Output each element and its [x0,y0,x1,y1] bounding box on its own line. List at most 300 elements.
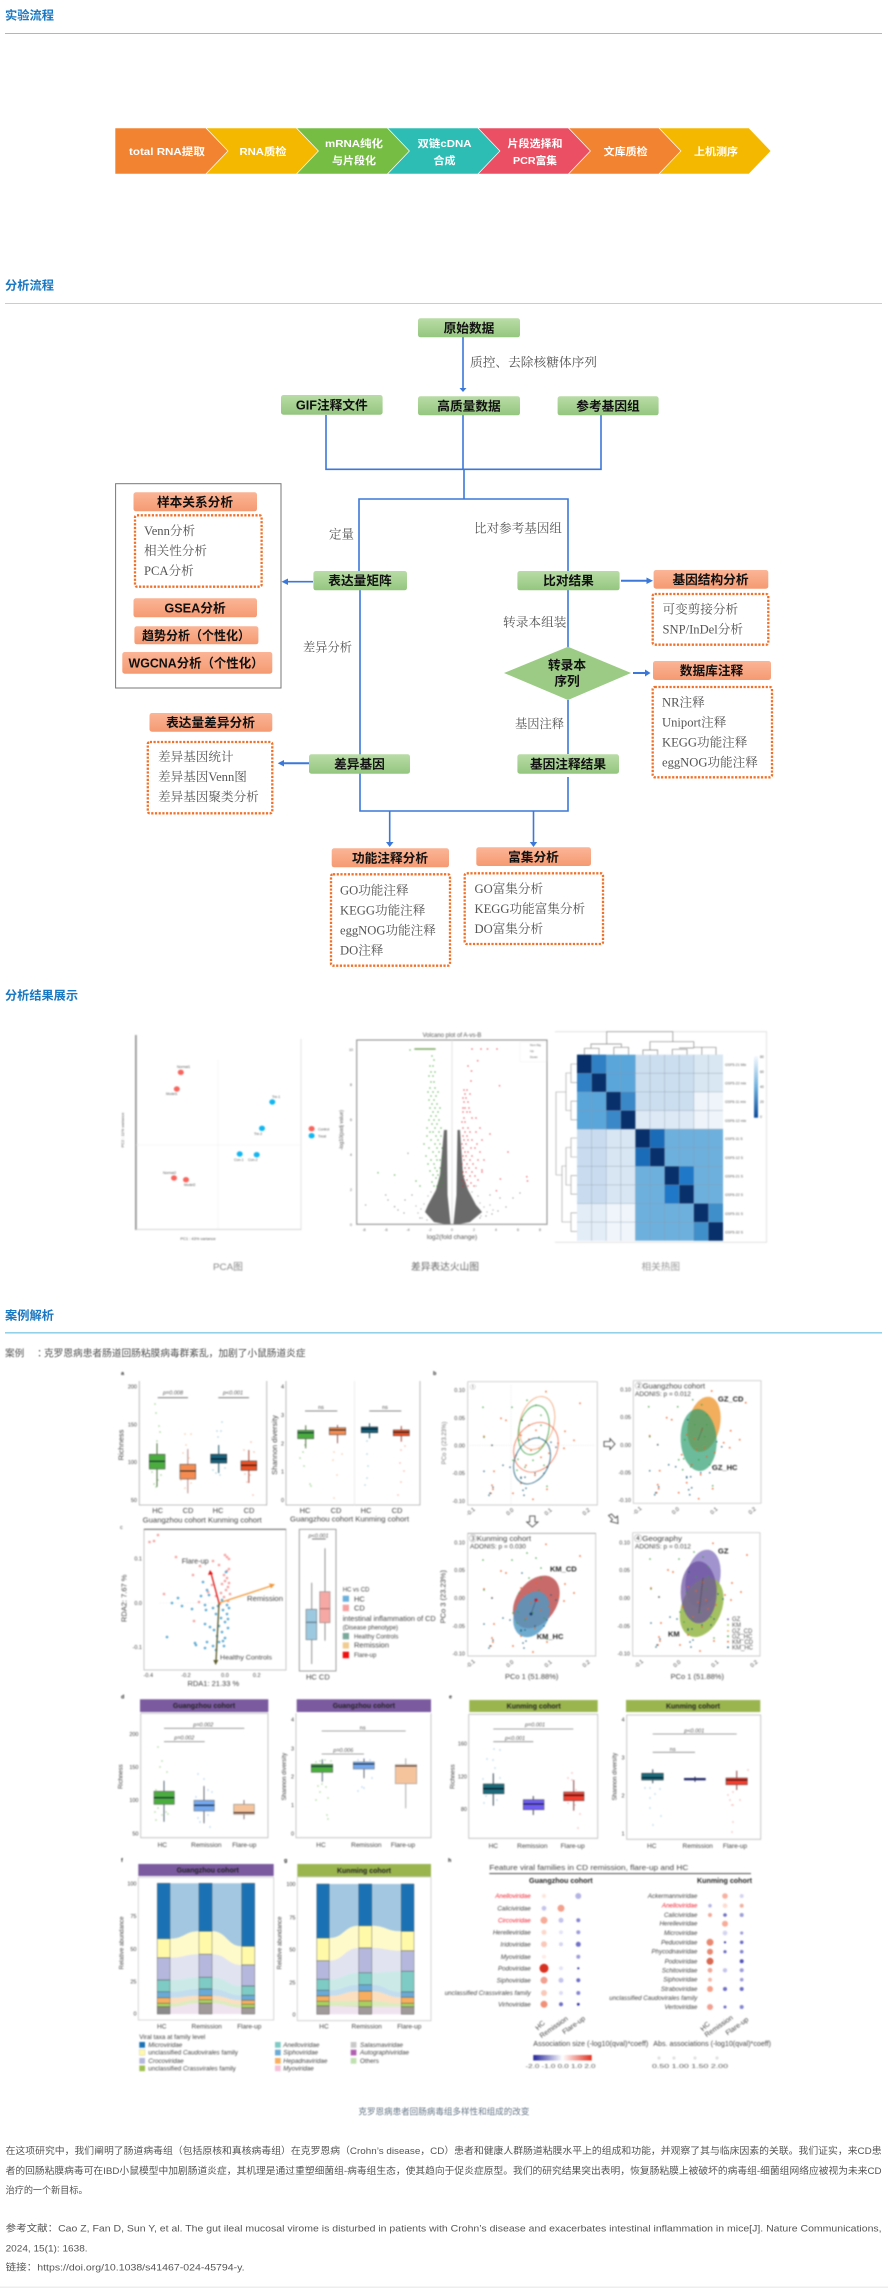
panel b: Geography PCoA: 0.2 [749,1659,759,1669]
panel a: richness boxplots [116,1371,267,1524]
panel d: Guangzhou richness: 150 [129,1765,138,1771]
panel e: Kunming shannon: 4 [621,1717,624,1723]
node: 原始数据 [418,318,520,337]
legend: viral taxa: Viral taxa at family level [139,2034,205,2041]
chart: PCA scatter: PC1 : 43% variance [180,1236,216,1241]
chart: volcano plot: 10 [349,1048,353,1052]
chart: correlation heatmap: GSF6-11 mix [725,1100,746,1104]
chart: volcano plot: Volcano plot of A-vs-B [423,1033,481,1039]
panel e: Kunming richness: Flare-up [561,1843,585,1850]
panel b: Geography PCoA: GZ_HC [732,1634,753,1640]
legend: viral taxa: Anelloviridae [282,2042,320,2049]
panel d: Guangzhou richness: HC [158,1842,167,1849]
chart: correlation heatmap: 60 [760,1070,764,1074]
button: WGCNA分析: WGCNA分析（个性化） [128,656,264,670]
node: 转录本序列 diamond: 序列 [554,674,580,688]
panel a: shannon boxplots: Guangzhou cohort Kunming cohort [290,1514,410,1524]
button: WGCNA分析 [122,652,272,674]
panel g: Kunming alluvial [278,1858,431,2030]
panel g: Kunming alluvial: HC [319,2024,329,2030]
process chevrons: 上机测序 [694,145,739,158]
panel b: Kunming PCoA: ③Kunming cohort [469,1534,532,1543]
panel h: feature viral families dot plot: Caliciviridae [664,1912,698,1919]
panel c: RDA biplot: Healthy Controls [220,1656,272,1662]
chart: correlation heatmap: 0 [760,1115,762,1119]
process chevrons: total RNA提取 [129,145,206,158]
edge labels: 定量 [329,528,354,542]
panel b: Kunming PCoA: 0.2 [582,1659,592,1669]
figure: case study panels [116,1371,771,2072]
panel c: RDA biplot: 0.2 [253,1673,261,1679]
panel c: RDA biplot: -0.4 [144,1673,153,1679]
chart: volcano plot: 4 [495,1228,497,1232]
analysis flowchart [116,318,772,966]
panel: 基因结构分析 [653,570,768,645]
panel b: Geography PCoA: GZ [718,1546,729,1556]
legend: viral taxa: Myoviridae [283,2066,314,2072]
chart: volcano plot: Non-Sig [530,1043,541,1047]
panel g: Kunming alluvial: 100 [286,1882,296,1888]
captions: 差异表达火山图 [411,1261,479,1273]
panel d: Guangzhou richness: Flare-up [232,1842,257,1849]
chart: correlation heatmap: GSF6-22 S [725,1193,744,1197]
panel: 功能注释分析: KEGG功能注释 [340,902,426,918]
legend: viral taxa: Autographiviridae [359,2050,410,2057]
panel b: Geography PCoA: KM [668,1630,680,1638]
panel a: shannon boxplots: 2 [281,1441,284,1447]
panel: 数据库注释: NR注释 [662,696,705,710]
case title: 案例 ： [5,1348,47,1360]
panel a: shannon boxplots: HC [300,1506,311,1515]
panel b: Geography PCoA [617,1533,760,1681]
panel d: Guangzhou shannon: 0 [291,1831,294,1837]
panel b: Guangzhou PCoA: 0.05 [620,1415,631,1421]
panel b: PCoA all groups: 0.10 [454,1388,465,1394]
chart: volcano plot: 4 [350,1153,352,1157]
panel a: shannon boxplots: ns [318,1405,324,1411]
panel h: feature viral families dot plot: Virhoviridae [498,2002,531,2008]
panel a: richness boxplots: CD [183,1506,194,1515]
panel: 表达量差异分析: 差异基因聚类分析 [158,789,259,804]
panel b: Geography PCoA: 0.05 [619,1568,630,1574]
node: 比对结果: 比对结果 [543,573,594,588]
panel f: Guangzhou alluvial: Relative abundance [120,1916,126,1970]
panel b: Kunming PCoA: 0.10 [454,1540,465,1546]
panel b: PCoA all groups: -0.1 [465,1507,477,1518]
panel: 功能注释分析 [331,848,450,966]
process chevrons: RNA质检 [240,145,287,158]
chart: volcano plot: 0 [451,1228,453,1232]
references [6,2222,882,2274]
panel c: RDA biplot: 0.1 [134,1556,142,1562]
panel: 基因结构分析: 可变剪接分析 [662,602,738,616]
panel b: Geography PCoA: -0.10 [617,1652,630,1658]
node: 参考基因组 [558,396,659,415]
references: 链接：https://doi.org/10.1038/s41467-024-45794-y. [6,2262,245,2274]
node: 表达量矩阵: 表达量矩阵 [328,573,392,588]
panel b: Kunming PCoA: 0.00 [454,1596,465,1602]
legend: viral taxa: Microviridae [148,2042,183,2049]
panel a: richness boxplots: CD [244,1506,255,1515]
chart: volcano plot: -8 [362,1228,366,1232]
legend: viral taxa: unclassified Crassvirales family [148,2066,237,2072]
panel: 富集分析 [465,847,603,944]
panel c: HC vs CD boxplot [299,1529,336,1682]
panel a: shannon boxplots: ns [382,1405,388,1411]
heading: 分析流程: 分析流程 [5,278,54,292]
panel c: RDA biplot: c [120,1525,123,1531]
panel b: PCoA all groups: b [433,1371,437,1377]
case title: 克罗恩病患者肠道回肠粘膜病毒群紊乱，加剧了小鼠肠道炎症 [44,1346,306,1360]
panel a: shannon boxplots: CD [331,1506,342,1515]
node: GIF注释文件: GIF注释文件 [296,398,368,412]
heading: 案例解析: 案例解析 [5,1308,54,1322]
chart: correlation heatmap: GSF5-32 S [725,1230,744,1234]
panel g: Kunming alluvial: Flare-up [397,2024,422,2030]
panel h: feature viral families dot plot: Anelloviridae [661,1903,698,1910]
panel b: Guangzhou PCoA: GZ_CD [718,1394,744,1404]
panel e: Kunming shannon: p<0.001 [683,1728,704,1734]
node: 转录本序列 diamond: 转录本 [548,658,586,672]
legend: viral taxa: Salasmaviridae [360,2042,404,2049]
panel d: Guangzhou shannon: ns [360,1726,366,1732]
panel d: Guangzhou shannon: 2 [291,1775,294,1781]
panel e: Kunming richness: Remission [517,1843,548,1850]
panel d: Guangzhou richness: p=0.002 [173,1735,194,1741]
panel d: Guangzhou shannon: p=0.006 [332,1748,354,1754]
panel d: Guangzhou shannon: Shannon diversity [282,1753,288,1801]
panel h: feature viral families dot plot: Feature viral families in CD remission, flare-up and HC [489,1863,689,1872]
panel c: RDA biplot: Remission [247,1594,283,1603]
panel b: PCoA all groups: -0.10 [452,1499,465,1505]
panel f: Guangzhou alluvial: Guangzhou cohort [177,1868,239,1874]
panel d: Guangzhou richness: Guangzhou cohort [173,1703,236,1710]
panel b: PCoA all groups: 0.1 [544,1507,554,1517]
panel h: feature viral families dot plot: Podoviridae [665,1958,698,1965]
edge labels: 比对参考基因组 [474,520,562,536]
panel b: Geography PCoA: GZ_CD [732,1629,753,1635]
body paragraph: 治疗的一个新目标。 [6,2184,88,2196]
panel h: feature viral families dot plot: Peduoviridae [661,1939,698,1946]
panel b: Guangzhou PCoA: 0.0 [671,1506,681,1516]
panel a: richness boxplots: a [121,1371,125,1377]
panel a: richness boxplots: 200 [128,1385,137,1391]
edge labels: 转录本组装 [503,614,567,630]
panel e: Kunming richness: 80 [461,1807,467,1813]
panel d: Guangzhou shannon: Flare-up [391,1842,415,1849]
panel e: Kunming richness: 160 [458,1742,467,1748]
legend: viral taxa: Hepadnaviridae [283,2058,328,2065]
panel d: Guangzhou richness: Richness [118,1764,124,1789]
panel a: richness boxplots: 100 [128,1460,137,1466]
panel: 基因结构分析: SNP/InDel分析 [662,622,743,636]
panel h: feature viral families dot plot: Iridoviridae [500,1942,531,1948]
node: 表达量矩阵 [313,571,407,590]
panel c: HC vs CD boxplot: p<0.001 [307,1534,329,1540]
panel f: Guangzhou alluvial: Flare-up [237,2024,262,2030]
chart: volcano plot: 2 [473,1228,475,1232]
panel b: Guangzhou PCoA: ②Guangzhou cohort [635,1382,706,1390]
panel h: feature viral families dot plot: Podoviridae [498,1966,531,1972]
panel e: Kunming shannon: Remission [683,1843,713,1850]
button: GSEA分析 [134,598,257,617]
process chevrons: 合成 [434,154,456,167]
panel d: Guangzhou richness: d [121,1694,124,1700]
panel: 富集分析: 富集分析 [508,850,559,864]
panel h: feature viral families dot plot: Flare-up [561,2015,587,2036]
panel e: Kunming richness: Kunming cohort [507,1704,561,1710]
panel h: feature viral families dot plot: Circoviridae [498,1918,531,1924]
body paragraph [6,2145,882,2196]
panel c: RDA biplot: 0.0 [221,1673,229,1679]
arrow: to Kunming plot [527,1516,538,1527]
panel b: Kunming PCoA: KM_HC [537,1632,564,1641]
panel c: legend: CD [354,1604,365,1612]
panel h: feature viral families dot plot: Herelleviridae [493,1930,531,1936]
arrow: to Geography plot [608,1514,618,1524]
panel b: PCoA all groups: PCo 3 (23.23%) [442,1422,448,1464]
edge labels: 质控、去除核糖体序列 [470,354,597,370]
panel: 表达量差异分析: 表达量差异分析 [166,715,255,730]
panel h: feature viral families dot plot: Phycodnaviridae [652,1949,698,1956]
panel d: Guangzhou shannon: Guangzhou cohort [333,1703,396,1710]
node: 原始数据: 原始数据 [444,320,495,336]
chart: PCA scatter: Treat [318,1134,326,1138]
chart: correlation heatmap: GSF5-31 S [725,1212,744,1216]
panel h: feature viral families dot plot: Remission [704,2014,735,2039]
chart: PCA scatter: Model1 [166,1092,178,1096]
panel b: Geography PCoA: -0.05 [617,1624,630,1630]
panel e: Kunming richness: p<0.001 [504,1736,525,1742]
panel h: feature viral families dot plot: Herelleviridae [659,1921,698,1928]
panel c: legend: (Disease phenotype) [343,1626,398,1632]
panel: 功能注释分析: GO功能注释 [340,882,409,898]
process chevrons: PCR富集 [513,154,558,167]
heading: 实验流程: 实验流程 [5,8,54,22]
panel d: Guangzhou shannon: HC [316,1842,326,1849]
panel c: legend: Flare-up [354,1653,377,1659]
panel c: legend: HC vs CD [343,1588,370,1594]
chart: volcano plot: -2 [428,1228,432,1232]
panel e: Kunming shannon: 2 [621,1793,624,1799]
node: 差异基因: 差异基因 [334,756,385,772]
edge labels: 差异分析 [303,640,352,654]
panel h: feature viral families dot plot: Flare-up [725,2016,750,2037]
panel b: Geography PCoA: KM_HC [732,1646,754,1652]
panel c: RDA biplot: RDA2: 7.67 % [120,1574,128,1622]
panel e: Kunming shannon: Kunming cohort [666,1704,721,1710]
chart: volcano plot: 6 [517,1228,519,1232]
panel: 富集分析: GO富集分析 [474,881,543,896]
panel g: Kunming alluvial: Kunming cohort [337,1868,392,1875]
chart: volcano plot: -log10(padj value) [339,1110,345,1150]
body paragraph: 者的回肠粘膜病毒可在IBD小鼠模型中加剧肠道炎症，其机理是通过重塑细菌组-病毒组生态，使其趋向于促炎症原型。我们的研究结果突出表明，恢复肠粘膜上被破坏的病毒组-细菌组网络应被视为未来CD [6,2165,882,2177]
panel: 功能注释分析: DO注释 [340,944,384,958]
panel e: Kunming richness: 120 [458,1774,467,1780]
node: 比对结果 [517,571,620,590]
panel e: Kunming shannon: 3 [621,1755,624,1761]
process chevrons: 文库质检 [604,145,648,158]
panel e: Kunming richness [449,1694,598,1850]
panel b: Kunming PCoA [438,1533,596,1681]
panel a: richness boxplots: 50 [131,1498,137,1504]
node: 高质量数据 [418,396,520,415]
panel f: Guangzhou alluvial [120,1858,274,2030]
panel e: Kunming richness: Richness [450,1764,456,1789]
chart: correlation heatmap: 20 [760,1100,764,1104]
node: 转录本序列 diamond [504,647,631,700]
chart: volcano plot: 6 [350,1118,352,1122]
panel c: RDA biplot: 0.0 [134,1601,142,1607]
panel b: Geography PCoA: KM [732,1623,741,1629]
panel b: Geography PCoA: 0.1 [710,1659,720,1669]
legend: viral taxa: Crocoviridae [148,2058,184,2065]
panel e: Kunming shannon: Shannon diversity [612,1753,618,1801]
chart: PCA scatter: Con-1 [234,1158,244,1162]
panel b: Guangzhou PCoA: 0.00 [620,1443,631,1449]
panel: 数据库注释: Uniport注释 [662,716,727,730]
panel d: Guangzhou richness: 50 [132,1831,138,1837]
panel c: legend [343,1588,436,1659]
panel: 样本关系分析: 相关性分析 [144,543,207,558]
panel b: Kunming PCoA: KM_CD [550,1564,577,1574]
panel b: Geography PCoA: GZ [732,1617,741,1623]
panel g: Kunming alluvial: 50 [289,1947,296,1953]
panel a: richness boxplots: HC [213,1506,224,1515]
button: 趋势分析: 趋势分析（个性化） [142,628,250,643]
panel c: legend: Remission [354,1640,389,1650]
panel g: Kunming alluvial: Remission [352,2024,382,2030]
chart: PCA scatter: Tre-1 [272,1095,280,1099]
panel: 数据库注释 [653,661,772,777]
chart: correlation heatmap: GSF5-11 S [725,1137,743,1141]
panel g: Kunming alluvial: Relative abundance [278,1916,284,1970]
chart: volcano plot: log2(fold change) [427,1234,477,1241]
legend: viral taxa: Others [360,2058,379,2065]
panel c: legend: intestinal inflammation of CD [343,1614,436,1623]
panel a: shannon boxplots: 0 [281,1498,284,1504]
chart: PCA scatter: Con-2 [248,1158,258,1162]
panel h: feature viral families dot plot: Vertoviridae [665,2004,698,2011]
panel b: Geography PCoA: 0.10 [619,1540,630,1546]
panel e: Kunming richness: e [449,1694,452,1700]
panel b: Geography PCoA: ADONIS: p = 0.012 [635,1544,691,1550]
chart: volcano plot [339,1033,547,1241]
panel c: legend: HC [354,1594,365,1604]
node: 参考基因组: 参考基因组 [576,398,640,414]
panel b: PCoA all groups: -0.05 [452,1471,465,1477]
chart: correlation heatmap: 80 [760,1055,764,1059]
chart: volcano plot: -4 [406,1228,410,1232]
panel c: RDA biplot: -0.2 [181,1673,191,1679]
legend: viral taxa: unclassified Caudovirales family [148,2050,239,2057]
panel f: Guangzhou alluvial: 100 [127,1881,136,1887]
panel h: feature viral families dot plot: Guangzhou cohort [529,1876,593,1885]
figure caption: 克罗恩病患者回肠病毒组多样性和组成的改变 [358,2106,530,2117]
panel b: Guangzhou PCoA: 0.2 [748,1506,758,1516]
panel b: Guangzhou PCoA: -0.05 [618,1470,631,1476]
panel: 样本关系分析: PCA分析 [144,563,194,578]
panel b: Kunming PCoA: -0.05 [452,1624,465,1630]
panel b: Kunming PCoA: PCo 1 (51.88%) [505,1672,559,1681]
panel h: feature viral families dot plot: Kunming cohort [697,1876,752,1885]
panel d: Guangzhou shannon [282,1699,431,1849]
button: GSEA分析: GSEA分析 [164,600,226,616]
panel b: PCoA all groups [433,1371,597,1518]
panel e: Kunming richness: p=0.001 [524,1722,545,1728]
panel b: PCoA all groups: 0.2 [582,1507,592,1517]
panel d: Guangzhou richness [118,1694,268,1849]
results images [120,1032,766,1273]
panel a: shannon boxplots: CD [392,1506,403,1515]
edge labels: 基因注释 [515,717,564,731]
chart: PCA scatter [120,1035,330,1241]
panel a: shannon boxplots: 3 [281,1413,284,1419]
heading: 分析结果展示: 分析结果展示 [5,988,78,1002]
panel h: feature viral families dot plot [445,1858,771,2070]
chart: PCA scatter: Control [318,1128,330,1132]
chart: volcano plot: Down [530,1055,538,1059]
panel g: Kunming alluvial: 75 [289,1915,296,1921]
panel: 数据库注释: KEGG功能注释 [662,734,748,750]
panel c: legend: Healthy Controls [354,1634,398,1640]
captions: PCA图 [213,1262,243,1273]
legend: viral taxa [139,2034,410,2072]
grey bounding box [116,484,281,688]
chart: volcano plot: 8 [350,1083,352,1087]
panel b: Geography PCoA: ④Geography [634,1534,682,1543]
chart: volcano plot: 8 [539,1228,541,1232]
panel e: Kunming richness: HC [489,1843,498,1850]
chart: correlation heatmap: GSF5-22 mix [725,1082,746,1086]
panel b: Geography PCoA: 0.0 [672,1659,682,1669]
panel a: shannon boxplots: HC [361,1506,372,1515]
process chevrons: 片段选择和 [508,137,562,150]
node: 基因注释结果 [517,754,619,774]
panel c: RDA biplot: -0.1 [133,1645,142,1651]
panel a: richness boxplots: 150 [128,1422,137,1428]
panel b: Guangzhou PCoA: 0.10 [620,1388,631,1394]
panel h: feature viral families dot plot: Ackermannviridae [647,1893,698,1900]
panel f: Guangzhou alluvial: Remission [192,2024,222,2030]
panel h: feature viral families dot plot: h [448,1858,452,1864]
panel g: Kunming alluvial: 25 [289,1980,296,1986]
node: GIF注释文件 [281,395,383,415]
captions [213,1261,680,1273]
panel d: Guangzhou richness: 200 [129,1732,138,1738]
panel e: Kunming shannon: ns [670,1747,676,1753]
panel h: feature viral families dot plot: Association size (-log10(qval)*coeff) [533,2039,649,2048]
connectors [278,337,653,847]
panel h: feature viral families dot plot: -2.0 -1.0 0.0 1.0 2.0 [526,2064,596,2070]
arrow: to Guangzhou plot [604,1438,615,1450]
panel h: feature viral families dot plot: 0.50 1.00 1.50 2.00 [652,2064,728,2070]
panel d: Guangzhou shannon: 4 [291,1717,294,1723]
chart: correlation heatmap: GSF6-12 mix [725,1119,746,1123]
panel h: feature viral families dot plot: Microviridae [664,1930,698,1937]
panel a: shannon boxplots: Shannon diversity [270,1415,279,1475]
panel b: PCoA all groups: 0.00 [454,1444,465,1450]
chart: PCA scatter: Normal2 [163,1171,176,1175]
captions: 相关热图 [642,1261,680,1273]
chart: volcano plot: -6 [384,1228,388,1232]
panel g: Kunming alluvial: g [284,1858,287,1864]
panel h: feature viral families dot plot: Myoviridae [501,1954,531,1961]
panel b: PCoA all groups: ① [470,1383,476,1391]
panel b: Kunming PCoA: ADONIS: p = 0.030 [470,1544,526,1550]
panel: 表达量差异分析: 差异基因统计 [158,749,234,764]
panel b: Guangzhou PCoA [618,1381,761,1517]
